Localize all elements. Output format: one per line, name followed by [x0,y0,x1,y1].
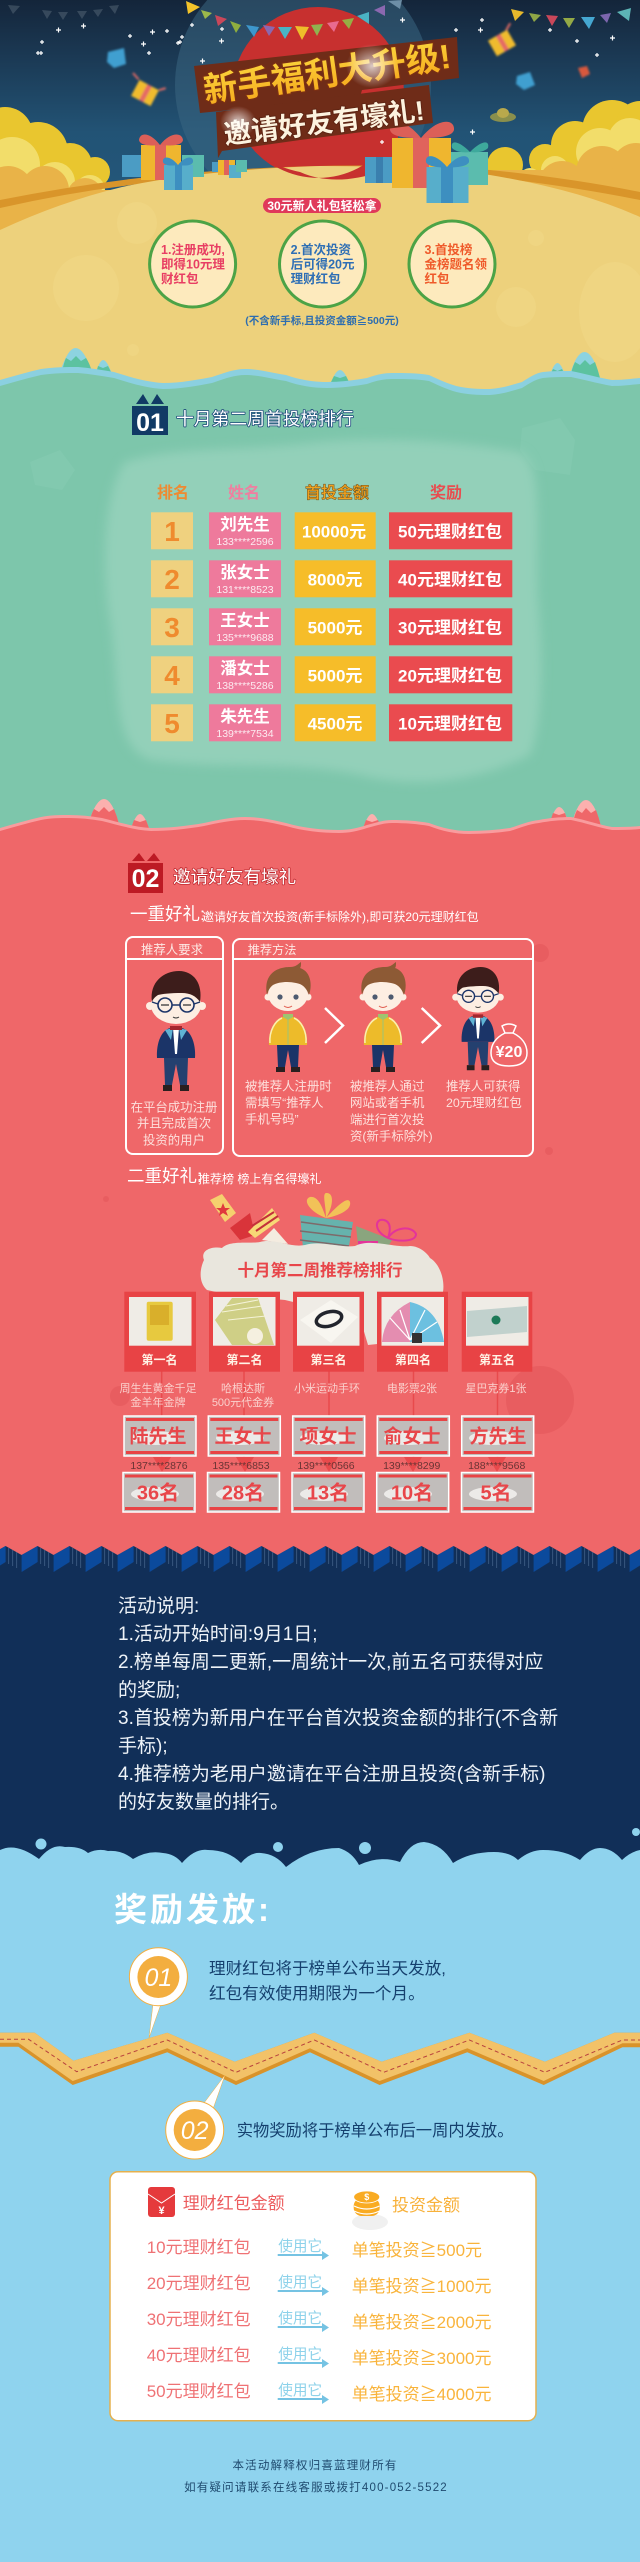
marker 01 [129,1948,187,2038]
panel: activity rules [0,1540,640,1950]
icon: gold coins: $ [364,2192,369,2202]
prize card 5: 第五名 [479,1352,515,1367]
rules text: 的奖励; [118,1679,180,1701]
prize card 1: 第一名 [141,1352,178,1367]
arrow one [325,1008,343,1043]
row 3: 30元理财红包 [398,618,502,638]
row 4 [151,656,512,693]
zigzag road [0,2033,640,2085]
badge 02: 02 [132,865,159,893]
rules text: 活动说明: [118,1595,199,1617]
row 5: 139****7534 [216,728,274,740]
rules text: 3.首投榜为新用户在平台首次投资金额的排行(不含新 [118,1707,558,1729]
step 3 circle: 金榜题名领 [424,256,488,272]
name plate 1 [124,1416,196,1456]
prize names: 小米运动手环 [294,1381,360,1395]
left gift group [122,135,247,190]
prize card 2 [209,1292,280,1372]
count plate 4 [377,1472,449,1512]
phone numbers: 135****6853 [212,1460,270,1472]
badge 02 [128,853,163,893]
title glow [220,44,398,138]
prize names: 哈根达斯 [221,1381,265,1395]
faint planet halo [175,0,431,213]
pale clouds left [0,137,105,205]
second reward text: 推荐榜 榜上有名得壕礼 [198,1171,321,1186]
character: referrer rewarded [452,967,504,1070]
investment thresholds [352,2241,492,2404]
small red shard [578,66,590,78]
faint dots [103,944,574,1434]
rules text: 手标); [118,1735,168,1757]
blue floating shards [107,48,535,90]
money bag: ¥20 [496,1044,522,1061]
panel: hero header [0,0,640,400]
sand ground [0,166,640,400]
name plate 4: 俞女士 [383,1424,441,1448]
row 1: 刘先生 [220,515,270,534]
panel: reward distribution [0,1828,640,2562]
panel: first-investment ranking [0,348,640,840]
rules text: 的好友数量的排行。 [118,1791,289,1813]
cloud banner [201,1241,445,1345]
prize names: 周生生黄金千足 [120,1381,196,1395]
box: referral method [233,939,533,1156]
column headers [157,483,462,502]
column headers: 姓名 [228,484,260,502]
step 2 circle: 理财红包 [291,271,341,286]
orange column heading: 投资金额 [392,2196,460,2215]
phone numbers: 139****8299 [383,1460,440,1472]
heading: 十月第二周首投榜排行: 十月第二周首投榜排行 [176,409,354,429]
row 2 [151,560,512,597]
title: 新手福利大升级: 新手福利大升级! [201,38,453,110]
heading: 邀请好友有壕礼: 邀请好友有壕礼 [173,867,296,887]
step 2 circle: 后可得20元 [291,256,355,272]
count plate 5: 5名 [480,1482,512,1504]
count plate 2 [208,1472,280,1512]
row 5: 5 [164,708,180,739]
box: referrer requirements [126,937,223,1154]
step texts: 20元理财红包 [446,1095,522,1110]
investment thresholds: 单笔投资≧2000元 [352,2313,492,2332]
box: referrer requirements: 在平台成功注册 [131,1100,217,1114]
box: referrer requirements: 推荐人要求 [141,943,203,957]
name plate 3: 项女士 [299,1424,357,1448]
step texts: 需填写“推荐人 [245,1096,323,1110]
red packet amounts: 10元理财红包 [147,2238,251,2257]
cloud banner: 十月第二周推荐榜排行 [238,1260,402,1280]
column headers: 排名 [157,484,189,502]
step 3 circle: 3.首投榜 [424,242,472,257]
first reward text: 一重好礼: [130,904,205,924]
name plate 2: 王女士 [214,1424,272,1448]
prize card 1 [124,1292,196,1372]
row 1: 10000元 [302,522,366,542]
investment thresholds: 单笔投资≧3000元 [352,2349,492,2368]
horizon band [0,166,640,208]
step 2 circle [280,221,366,307]
zigzag border [0,1540,640,1580]
prize card 3 [293,1292,364,1372]
row 5: 4500元 [308,714,362,734]
second reward text [127,1166,321,1186]
faint bunting left [8,5,119,20]
step 3 circle: 红包 [424,271,450,286]
prize card 3: 第三名 [310,1352,347,1367]
icon: red envelope [148,2187,175,2217]
arrows [278,2251,329,2404]
navy background [0,1540,640,1950]
phone numbers: 139****0566 [297,1460,355,1472]
light table panel [105,440,541,782]
step texts: 端进行首次投 [350,1112,424,1127]
floating gift left [123,71,166,108]
note 01 [209,1959,446,2003]
marker 02 [166,2075,225,2159]
badge 01 [132,394,168,437]
use-it labels [278,2237,322,2399]
count plate 3 [292,1472,364,1512]
icon: gold coins [352,2191,388,2230]
orange hills [0,143,640,260]
first reward text: 邀请好友首次投资(新手标除外),即可获20元理财红包 [202,909,479,924]
box: referrer requirements: 投资的用户 [143,1132,205,1148]
row 1: 50元理财红包 [398,522,502,542]
heading: 奖励发放: 奖励发放: [114,1891,272,1928]
prize names: 电影票2张 [387,1382,437,1395]
step 1 circle: 即得10元理 [161,256,225,272]
red column heading: 理财红包金额 [183,2194,285,2213]
name plate 3 [293,1416,365,1456]
character: invitee investing [360,962,406,1072]
panel: invite friends [0,799,640,2562]
row 4: 20元理财红包 [398,666,502,686]
red packet amounts: 40元理财红包 [147,2346,251,2365]
marker 02: 02 [181,2117,209,2145]
red planet overlap [262,124,398,180]
row 5 [151,704,512,741]
bunting centre [186,0,402,40]
investment thresholds: 单笔投资≧500元 [352,2241,482,2260]
connector lines [162,1371,497,1460]
wave edge pink [0,815,640,870]
box: referrer requirements: 并且完成首次 [137,1116,211,1130]
prize names [120,1381,527,1409]
green background [0,373,640,840]
note 02: 实物奖励将于榜单公布后一周内发放。 [237,2122,513,2140]
footer: 如有疑问请联系在线客服或拨打400-052-5522 [184,2480,448,2494]
character: invitee registering [264,962,312,1072]
name plate 1: 陆先生 [129,1426,187,1448]
right gift group [365,122,488,203]
row 3: 3 [164,612,180,643]
count plate 2: 28名 [222,1482,264,1504]
step texts: 手机号码” [245,1112,299,1126]
cloud edge [0,1842,640,2562]
row 1 [151,512,512,549]
row 3: 5000元 [308,618,362,638]
prize card 5 [462,1292,532,1372]
note: (不含新手标,且投资金额≧500元) [245,314,399,327]
rules text [118,1595,558,1813]
row 3: 135****9688 [216,632,274,644]
phone numbers [130,1460,525,1472]
title banner line one [194,37,459,113]
arrow two [422,1008,440,1043]
faint polygons [30,418,575,490]
arrow heads [153,1457,506,1472]
red packet amounts: 50元理财红包 [147,2382,251,2401]
stars [36,18,615,165]
step texts: 被推荐人注册时 [245,1078,332,1094]
use-it labels: 使用它 [278,2345,322,2363]
note 01: 理财红包将于榜单公布当天发放, [209,1959,446,1978]
step texts [245,1078,522,1144]
step 2 circle: 2.首次投资 [291,242,351,257]
pill label: 30元新人礼包轻松拿 [267,198,377,213]
mountains teal [60,348,600,382]
first reward text [130,904,479,924]
investment thresholds: 单笔投资≧1000元 [352,2277,492,2296]
subtitle: 邀请好友有壕礼: 邀请好友有壕礼! [222,95,426,150]
step 3 circle [409,221,495,307]
gift decorations [210,1193,416,1252]
use-it labels: 使用它 [278,2273,322,2291]
prize names: 500元代金券 [212,1395,274,1409]
red packet amounts: 30元理财红包 [147,2310,251,2329]
wave edge blue [0,367,640,420]
white table card [110,2172,536,2421]
step 1 circle [150,221,236,307]
red packet amounts: 20元理财红包 [147,2274,251,2293]
name plate 2 [208,1416,280,1456]
mountains red [88,799,601,828]
prize names: 星巴克券1张 [465,1381,527,1395]
prize card 4: 第四名 [395,1352,431,1367]
step texts: 网站或者手机 [350,1096,425,1110]
step texts: 推荐人可获得 [446,1078,520,1094]
name plate 5: 方先生 [469,1424,527,1448]
step texts: 资(新手标除外) [350,1128,433,1144]
use-it labels: 使用它 [278,2237,322,2255]
row 5: 10元理财红包 [398,714,502,734]
use-it labels: 使用它 [278,2309,322,2327]
rules text: 2.榜单每周二更新,一周统计一次,前五名可获得对应 [118,1651,543,1673]
character: referrer [146,971,206,1091]
yellow clouds left [0,107,110,187]
rules text: 4.推荐榜为老用户邀请在平台注册且投资(含新手标) [118,1763,546,1785]
bubbles [36,1828,640,1854]
use-it labels: 使用它 [278,2381,322,2399]
footer: 本活动解释权归喜蓝理财所有 [232,2458,398,2472]
night sky [0,0,640,240]
footer [184,2458,448,2494]
step 1 circle: 1.注册成功, [161,242,225,257]
row 5: 朱先生 [220,707,270,726]
note 01: 红包有效使用期限为一个月。 [209,1984,425,2003]
title banner line two [216,85,433,158]
count plate 5 [462,1472,534,1512]
row 2: 40元理财红包 [398,570,502,590]
row 3 [151,608,512,645]
row 1: 133****2596 [216,536,274,548]
column headers: 首投金额 [305,483,369,502]
row 1: 1 [164,516,180,547]
row 2: 张女士 [220,562,270,582]
name plate 5 [462,1416,534,1456]
step texts: 被推荐人通过 [350,1080,424,1094]
badge 01: 01 [136,409,164,437]
column headers: 奖励 [430,483,462,502]
floating gift right [486,23,521,56]
money bag [491,1024,527,1066]
bunting right [511,8,631,29]
prize names: 金羊年金牌 [130,1395,186,1409]
box: referral method: 推荐方法 [248,942,296,957]
row 4: 138****5286 [216,680,274,692]
count plate 4: 10名 [391,1482,433,1504]
prize card 2: 第二名 [226,1352,263,1367]
marker 01: 01 [144,1964,172,1992]
rules text: 1.活动开始时间:9月1日; [118,1623,318,1645]
phone numbers: 188****9568 [468,1460,525,1472]
row 3: 王女士 [220,610,270,630]
count plate 1 [123,1472,195,1512]
second reward text: 二重好礼: [127,1166,202,1186]
row 4: 潘女士 [220,658,270,678]
ufo [490,108,516,122]
count plate 1: 36名 [137,1482,179,1504]
prize card 4 [377,1292,448,1372]
pale clouds right [520,118,640,188]
phone numbers: 137****2876 [130,1460,188,1472]
row 2: 2 [164,564,180,595]
red background [0,818,640,1560]
row 4: 4 [164,660,180,691]
yellow clouds right [487,100,640,183]
investment thresholds: 单笔投资≧4000元 [352,2385,492,2404]
step 1 circle: 财红包 [161,271,199,286]
icon: red envelope: ¥ [158,2205,165,2217]
sand spots [53,202,640,362]
row 2: 8000元 [308,570,362,590]
name plate 4 [377,1416,449,1456]
row 2: 131****8523 [216,584,274,596]
red planet [232,7,404,179]
red packet amounts [147,2238,251,2401]
count plate 3: 13名 [307,1482,349,1504]
row 4: 5000元 [308,666,362,686]
